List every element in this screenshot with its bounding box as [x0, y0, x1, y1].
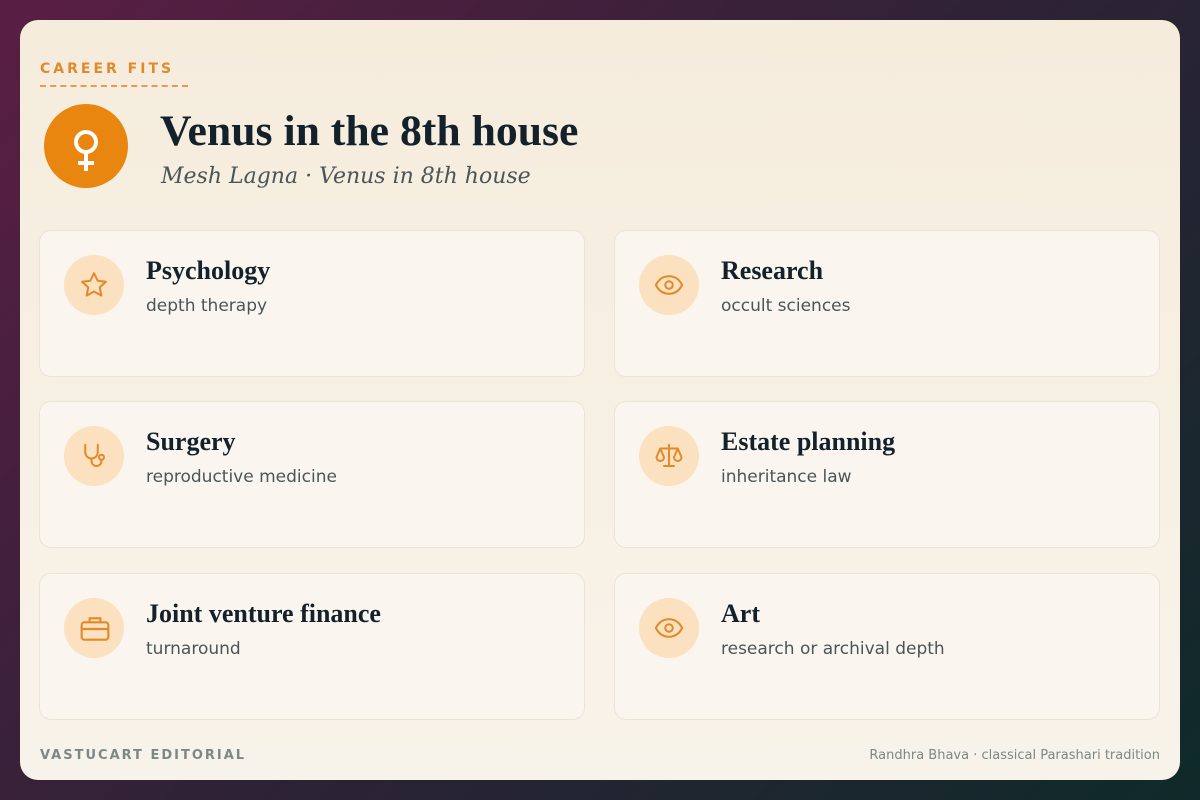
heading: Surgery [146, 427, 236, 456]
panel: psychology [39, 230, 585, 377]
panel: art [614, 573, 1160, 720]
text: reproductive medicine [146, 467, 337, 487]
heading: Psychology [146, 256, 270, 285]
footer left: VASTUCART EDITORIAL [40, 748, 246, 763]
panel: estate planning [614, 401, 1160, 548]
text: turnaround [146, 639, 241, 659]
kicker: career fits [40, 61, 188, 87]
icon: briefcase [64, 598, 124, 658]
text: occult sciences [721, 296, 850, 316]
subtitle: Mesh Lagna · Venus in 8th house [161, 164, 531, 189]
panel: joint venture finance [39, 573, 585, 720]
kicker: career fits: CAREER FITS [40, 61, 174, 77]
icon: scales [639, 426, 699, 486]
footer right: Randhra Bhava · classical Parashari tradition [869, 748, 1160, 763]
text: depth therapy [146, 296, 267, 316]
icon: star [64, 255, 124, 315]
icon: eye [639, 598, 699, 658]
title: Venus in the 8th house [160, 107, 578, 155]
icon: stethoscope [64, 426, 124, 486]
heading: Research [721, 256, 823, 285]
heading: Art [721, 599, 760, 628]
panel: research [614, 230, 1160, 377]
icon: venus badge [44, 104, 128, 188]
heading: Joint venture finance [146, 599, 381, 628]
panel: surgery [39, 401, 585, 548]
icon: eye [639, 255, 699, 315]
heading: Estate planning [721, 427, 895, 456]
text: research or archival depth [721, 639, 945, 659]
text: inheritance law [721, 467, 852, 487]
